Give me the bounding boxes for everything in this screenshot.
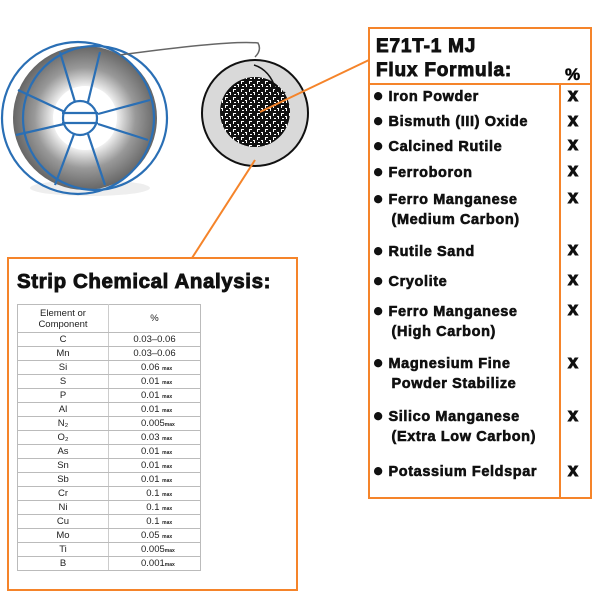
table: chemical composition: Component bbox=[38, 318, 88, 330]
list: flux ingredients: x bbox=[568, 299, 578, 319]
wire bbox=[120, 42, 259, 57]
list: flux ingredients: x bbox=[568, 85, 578, 105]
table: chemical composition: 0.05 max bbox=[141, 530, 172, 541]
list: flux ingredients: Powder Stabilize bbox=[392, 376, 516, 392]
panel: strip chemical analysis bbox=[7, 257, 298, 591]
percent header: % bbox=[565, 65, 580, 84]
heading: strip chemical analysis: Strip Chemical Analysis: bbox=[17, 270, 271, 293]
heading: flux formula: Flux Formula: bbox=[376, 60, 512, 81]
table: chemical composition: 0.1 max bbox=[146, 488, 172, 499]
table: chemical composition: S bbox=[60, 376, 66, 387]
table: chemical composition: 0.01 max bbox=[141, 404, 172, 415]
table: chemical composition: Si bbox=[59, 362, 67, 373]
panel: flux formula bbox=[368, 27, 592, 499]
table: chemical composition: 0.005max bbox=[141, 418, 175, 429]
list: flux ingredients: ● Cryolite bbox=[373, 271, 447, 290]
table: chemical composition: 0.03–0.06 bbox=[133, 334, 176, 345]
list: flux ingredients: ● Ferro Manganese bbox=[373, 301, 518, 320]
table: chemical composition: Ti bbox=[59, 544, 67, 555]
list: flux ingredients: (High Carbon) bbox=[392, 324, 496, 340]
connector lines bbox=[192, 60, 369, 258]
heading: flux formula bbox=[376, 36, 512, 81]
list: flux ingredients: ● Magnesium Fine bbox=[373, 353, 511, 372]
list: flux ingredients: x bbox=[568, 405, 578, 425]
table: chemical composition: As bbox=[57, 446, 69, 457]
list: flux ingredients: ● Iron Powder bbox=[373, 86, 479, 105]
table: chemical composition: O₂ bbox=[57, 432, 69, 443]
table: chemical composition: Sb bbox=[57, 474, 69, 485]
table: chemical composition: 0.01 max bbox=[141, 390, 172, 401]
list: flux ingredients: ● Silico Manganese bbox=[373, 406, 520, 425]
list: flux ingredients: ● Rutile Sand bbox=[373, 241, 475, 260]
table: chemical composition: Cr bbox=[58, 488, 68, 499]
table: chemical composition: 0.005max bbox=[141, 544, 175, 555]
table: chemical composition: Mn bbox=[56, 348, 70, 359]
icon: wire cross-section bbox=[202, 60, 308, 166]
table: chemical composition: 0.001max bbox=[141, 558, 175, 569]
list: flux ingredients: (Extra Low Carbon) bbox=[392, 429, 536, 445]
table: chemical composition: 0.01 max bbox=[141, 474, 172, 485]
table: chemical composition: N₂ bbox=[58, 418, 68, 429]
table: chemical composition: Ni bbox=[58, 502, 67, 513]
table: chemical composition: 0.06 max bbox=[141, 362, 172, 373]
list: flux ingredients: x bbox=[568, 269, 578, 289]
list: flux ingredients: ● Potassium Feldspar bbox=[373, 461, 537, 480]
table: chemical composition: Element or bbox=[40, 308, 86, 318]
list: flux ingredients: x bbox=[568, 110, 578, 130]
list: flux ingredients: ● Ferroboron bbox=[373, 162, 473, 181]
table: chemical composition: % bbox=[150, 313, 159, 324]
heading: flux formula: E71T-1 MJ bbox=[376, 36, 476, 57]
table: chemical composition: B bbox=[60, 558, 66, 569]
table: chemical composition: 0.03 max bbox=[141, 432, 172, 443]
table: chemical composition: 0.03–0.06 bbox=[133, 348, 176, 359]
list: flux ingredients: x bbox=[568, 187, 578, 207]
table: chemical composition bbox=[17, 304, 201, 571]
table: chemical composition: Cu bbox=[57, 516, 69, 527]
list: flux ingredients: ● Calcined Rutile bbox=[373, 136, 502, 155]
table: chemical composition: P bbox=[60, 390, 66, 401]
table: chemical composition: 0.01 max bbox=[141, 446, 172, 457]
list: flux ingredients: x bbox=[568, 134, 578, 154]
list: flux ingredients: ● Ferro Manganese bbox=[373, 189, 518, 208]
list: flux ingredients: x bbox=[568, 460, 578, 480]
table: chemical composition: 0.1 max bbox=[146, 516, 172, 527]
list: flux ingredients: (Medium Carbon) bbox=[392, 212, 520, 228]
table: chemical composition: 0.01 max bbox=[141, 376, 172, 387]
list: flux ingredients: x bbox=[568, 352, 578, 372]
table: chemical composition: C bbox=[60, 334, 66, 345]
list: flux ingredients: x bbox=[568, 239, 578, 259]
list: flux ingredients: x bbox=[568, 160, 578, 180]
table: chemical composition: Sn bbox=[57, 460, 69, 471]
icon: wire spool bbox=[2, 42, 167, 196]
table: chemical composition: Al bbox=[59, 404, 67, 415]
table: chemical composition: Mo bbox=[56, 530, 70, 541]
table: chemical composition: 0.1 max bbox=[146, 502, 172, 513]
list: flux ingredients: ● Bismuth (III) Oxide bbox=[373, 111, 528, 130]
table: chemical composition: 0.01 max bbox=[141, 460, 172, 471]
